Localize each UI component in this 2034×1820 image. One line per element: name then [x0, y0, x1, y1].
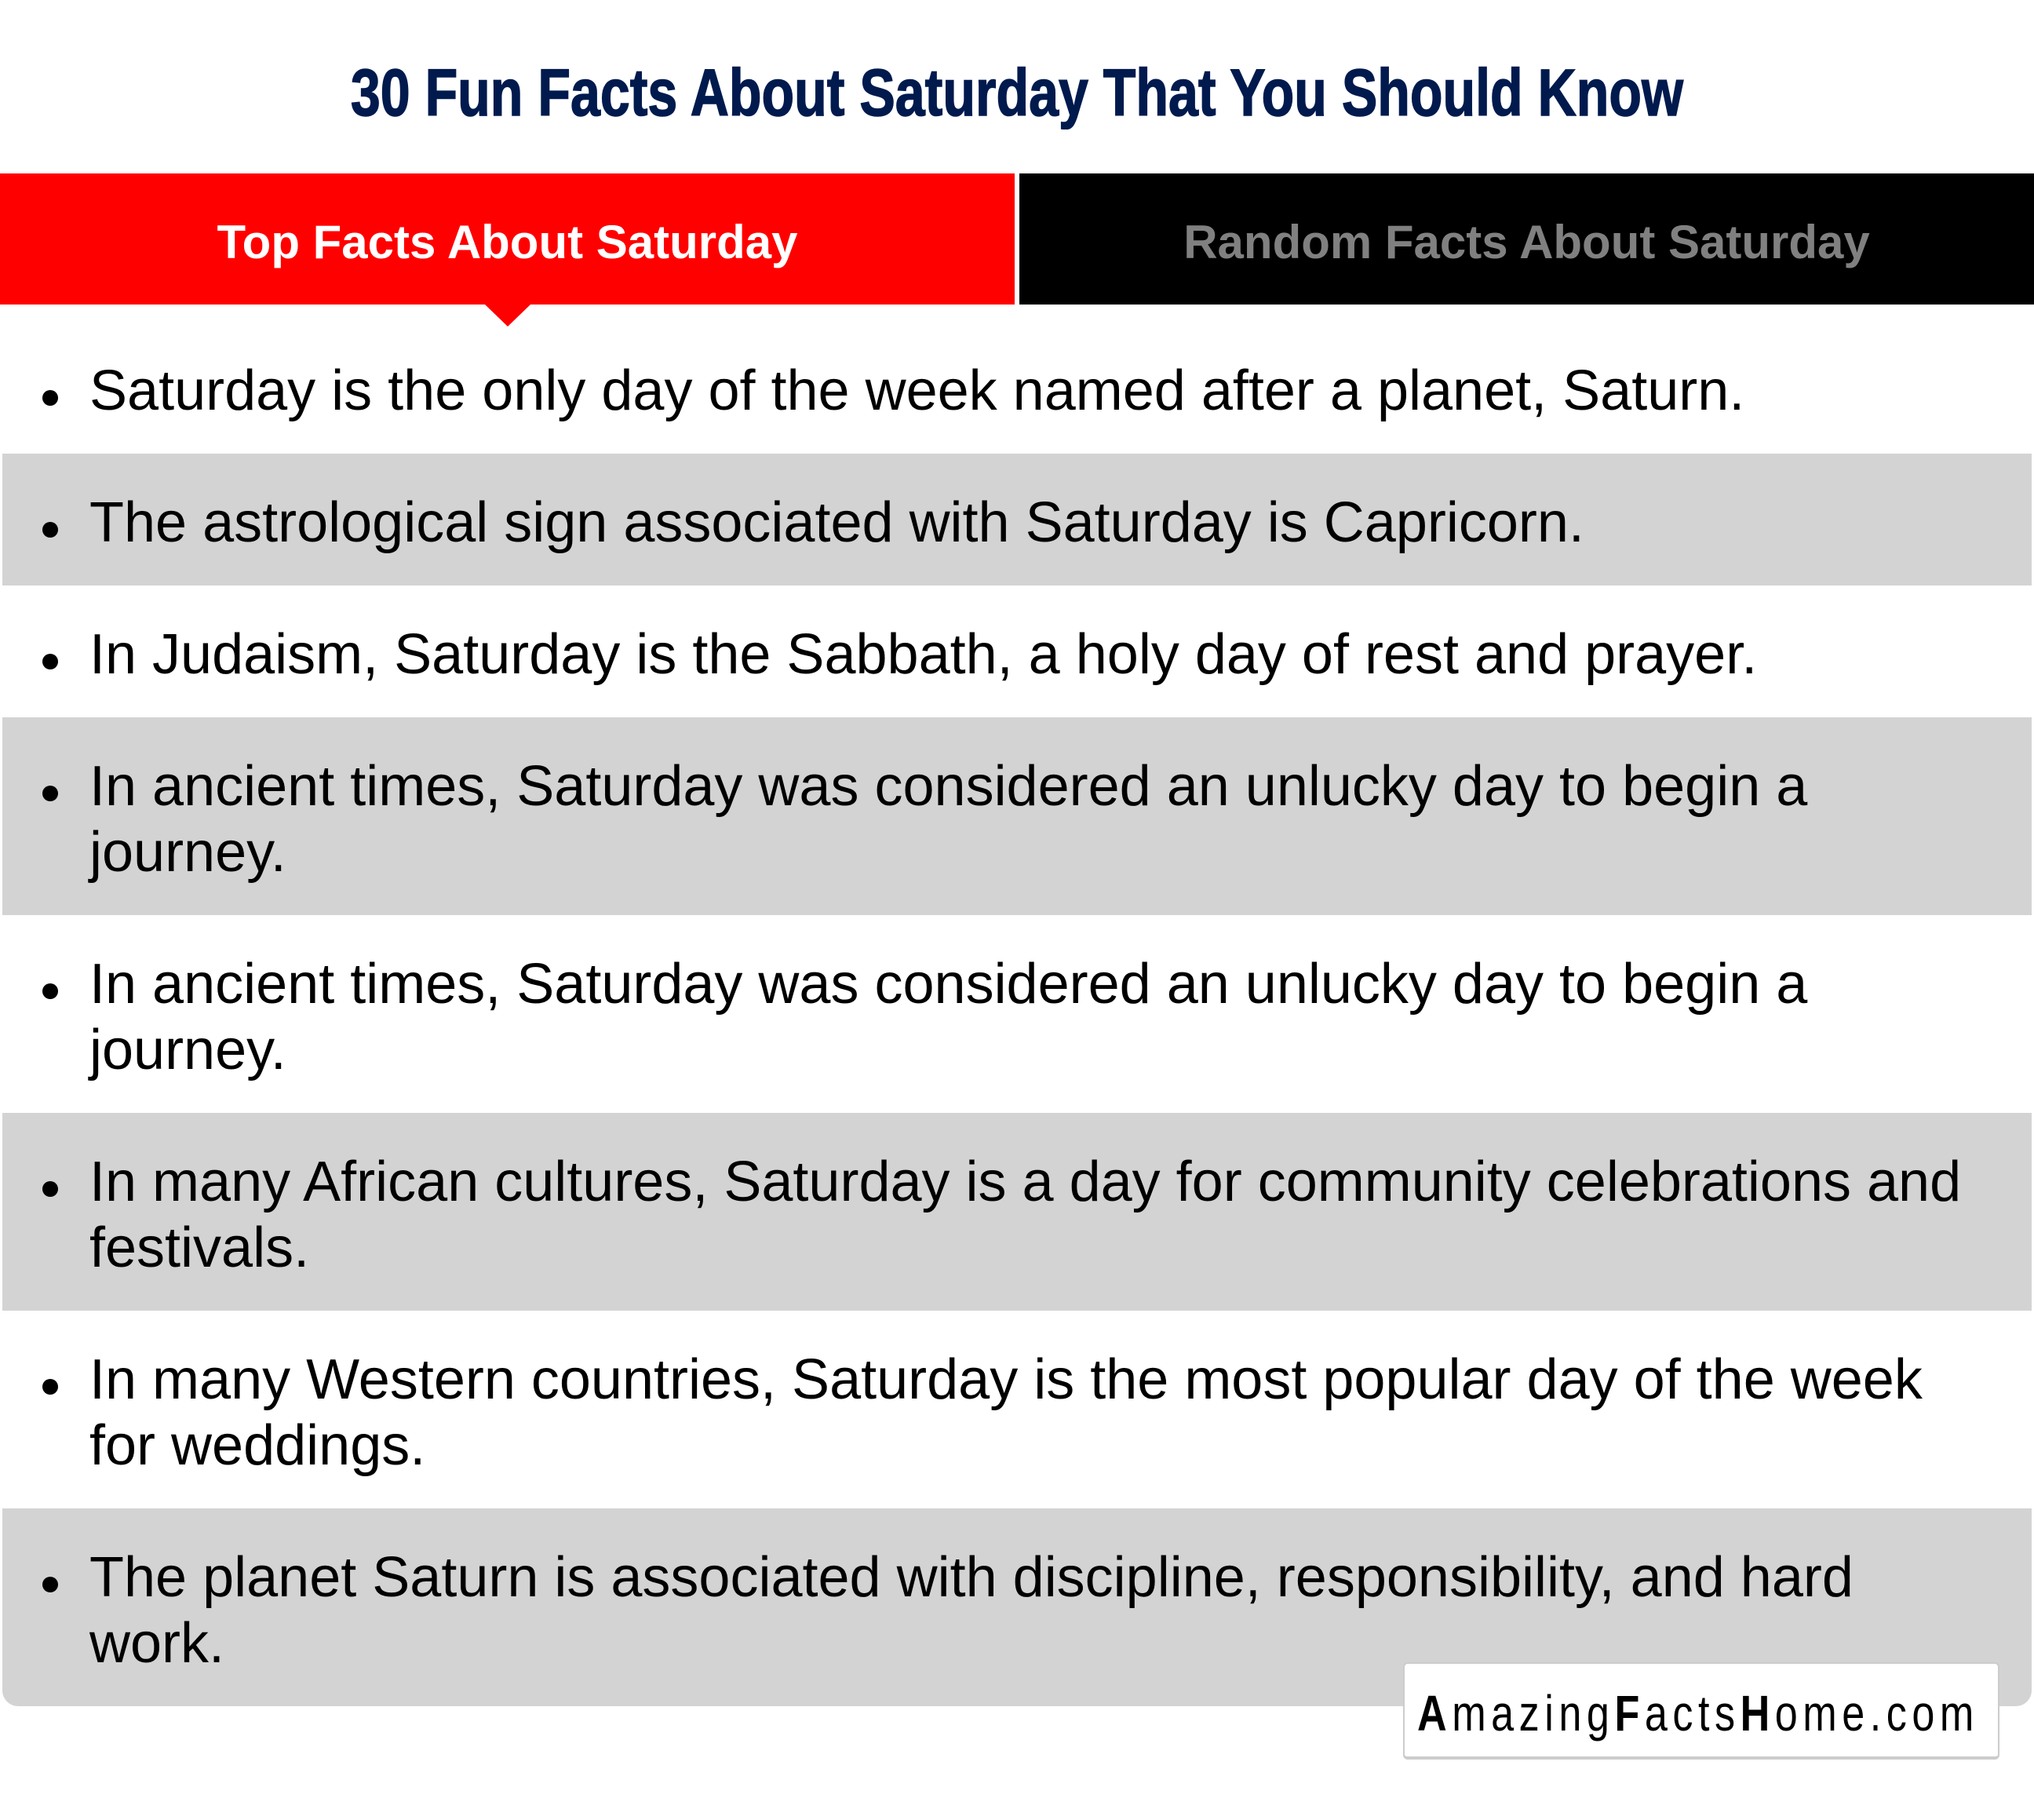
fact 5: journey.	[89, 1019, 286, 1081]
title: 30 Fun Facts About Saturday That You Should Know	[351, 56, 1683, 129]
fact 8	[2, 1508, 2032, 1706]
fact 2: The astrological sign associated with Saturday is Capricorn.	[89, 491, 1584, 554]
watermark: site name	[1403, 1662, 1999, 1760]
fact 7: In many Western countries, Saturday is the most popular day of the week	[89, 1348, 1923, 1411]
fact 6	[2, 1113, 2032, 1311]
tab: top facts: Top Facts About Saturday	[217, 216, 798, 268]
tab: random facts	[1019, 173, 2034, 305]
fact 6: festivals.	[89, 1216, 309, 1279]
arrow: active tab pointer	[485, 305, 530, 326]
fact 4: In ancient times, Saturday was considered an unlucky day to begin a	[89, 755, 1807, 818]
tab: random facts: Random Facts About Saturday	[1183, 216, 1870, 268]
fact 1: Saturday is the only day of the week named after a planet, Saturn.	[89, 359, 1744, 422]
fact 3: In Judaism, Saturday is the Sabbath, a holy day of rest and prayer.	[89, 623, 1757, 686]
tab: top facts	[0, 173, 1015, 305]
fact 4	[2, 717, 2032, 915]
fact 5	[42, 953, 1808, 1081]
fact 4: journey.	[89, 821, 286, 884]
fact 2	[2, 454, 2032, 585]
fact 8: work.	[89, 1612, 224, 1675]
watermark: site name: AmazingFactsHome.com	[1417, 1685, 1979, 1742]
fact 5: In ancient times, Saturday was considered an unlucky day to begin a	[89, 953, 1807, 1016]
fact 7	[42, 1348, 1923, 1477]
fact 6: In many African cultures, Saturday is a day for community celebrations and	[89, 1151, 1961, 1213]
fact 7: for weddings.	[89, 1414, 425, 1477]
fact 8: The planet Saturn is associated with discipline, responsibility, and hard	[89, 1546, 1854, 1609]
